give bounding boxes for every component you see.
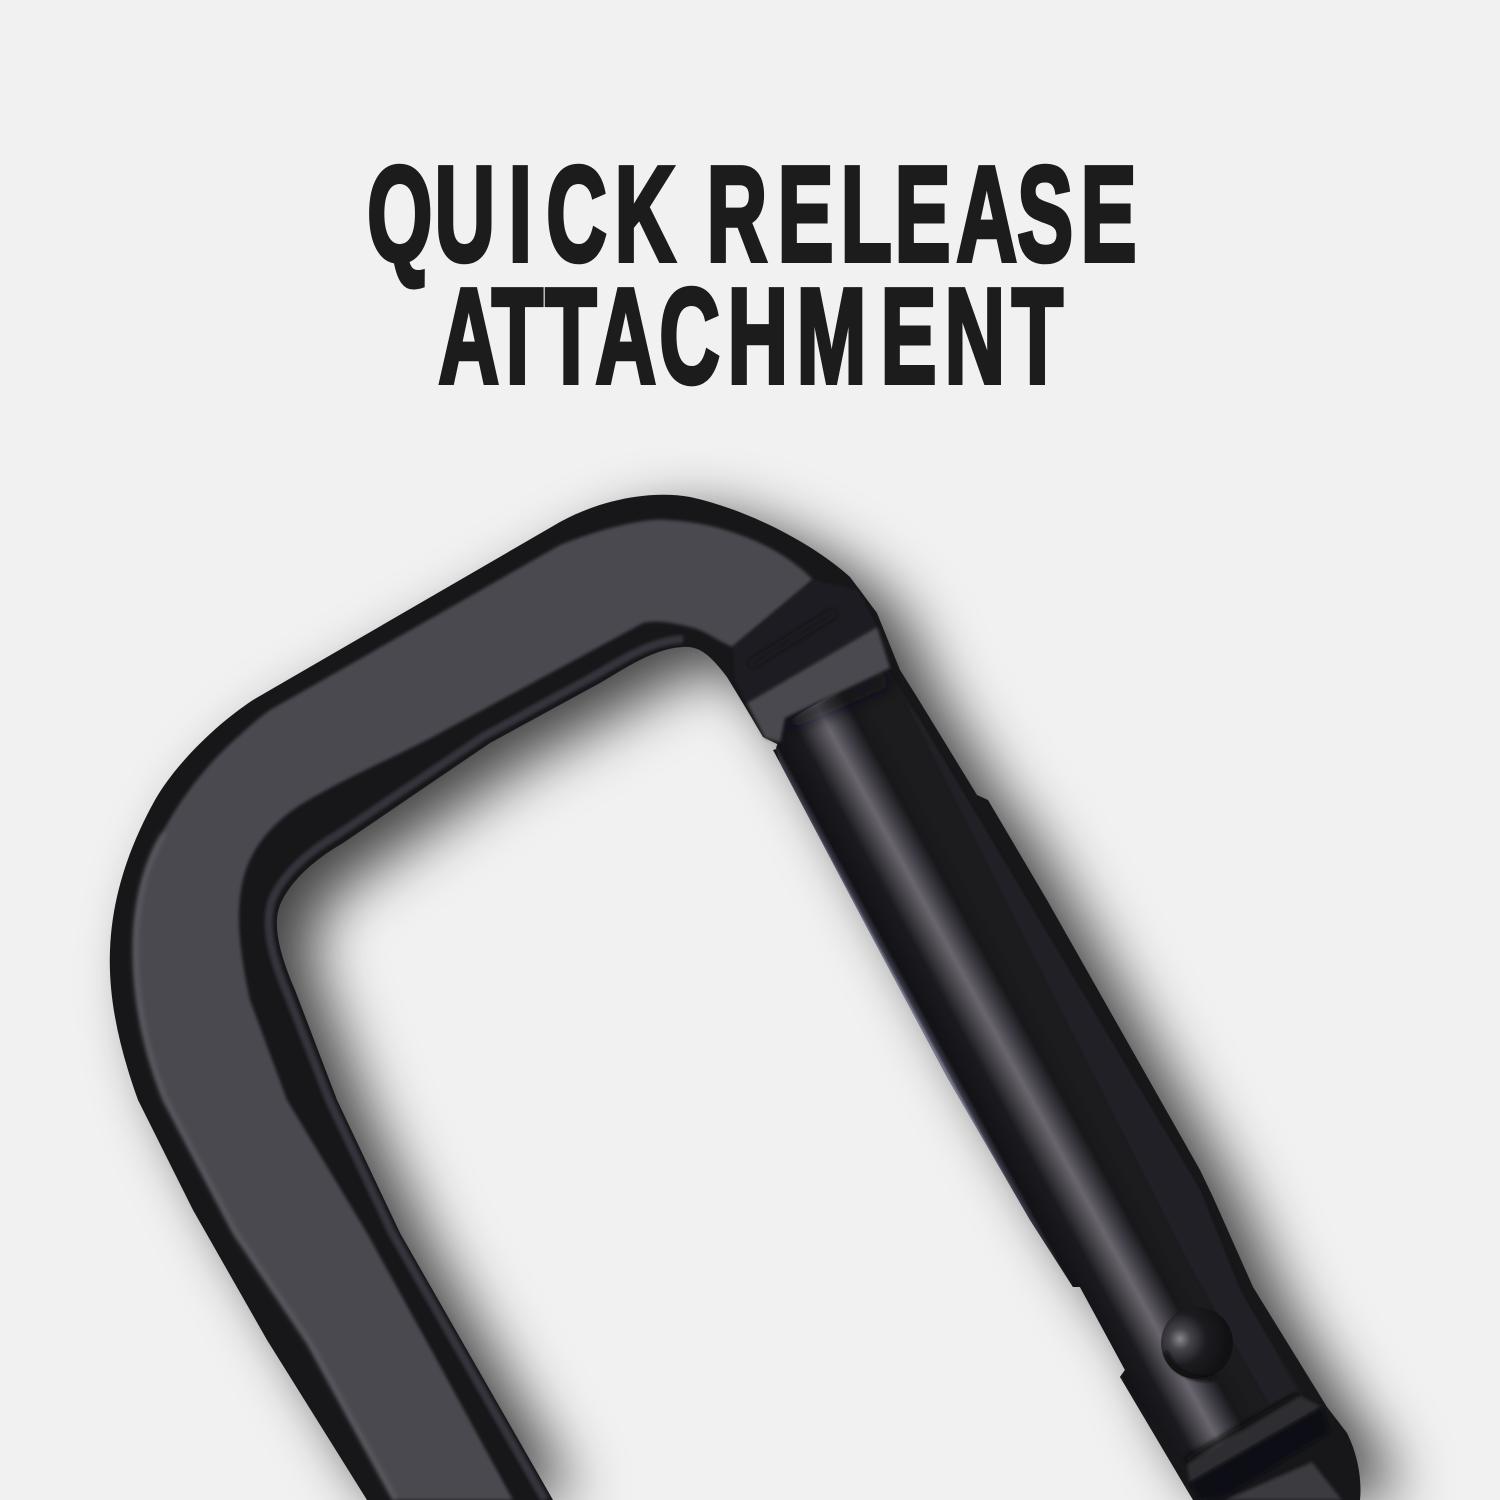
flat face of spine [133,520,813,1500]
neck shadow band [750,612,835,665]
upper gate collar [747,627,890,742]
gate cylinder [776,669,1303,1464]
gate lower recess shade [1187,1396,1298,1460]
lower nose face [1225,1462,1342,1500]
carabiner drop shadow [144,515,1394,1500]
release button [1161,1307,1233,1379]
gate top shade [782,668,892,730]
dark neck block [733,580,877,703]
title [367,138,1136,411]
carabiner [110,495,1360,1500]
carabiner base silhouette [110,495,1360,1500]
gate flat side [905,700,1298,1405]
button body [1161,1307,1233,1379]
title line 2: ATTACHMENT [439,260,1063,411]
inner bevel band [269,639,683,1500]
lower gate collar [1187,1396,1322,1483]
lower dark band [1190,1407,1330,1500]
face edge highlight [135,833,395,1500]
title line 1: QUICK RELEASE [367,138,1136,289]
button rim shade [1166,1352,1215,1379]
